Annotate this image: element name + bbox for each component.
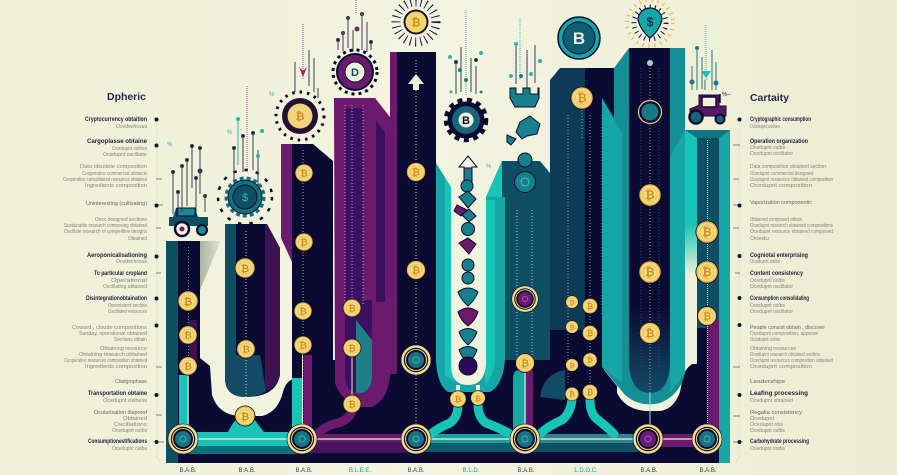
panel: left text column: Ocedechosus xyxy=(116,124,148,130)
panel: left text column: Obtaining research obtained xyxy=(79,352,147,358)
panel: left text column: Sustainable research composing obtained xyxy=(64,223,147,229)
icon: broken teal shapes xyxy=(507,88,540,145)
panel: right text column: Ocedupnt commercial designed xyxy=(750,171,813,177)
panel: left text column: Ocedupnt osthes xyxy=(112,146,147,152)
icon: gear with coin 2: $ xyxy=(242,192,248,204)
cream u-channel right xyxy=(602,342,697,411)
icon: tractor left xyxy=(169,208,208,236)
panel: left text column: Oscillations xyxy=(114,422,148,428)
curved connectors xyxy=(228,400,614,434)
panel: left text column: Sunday, operational obtained xyxy=(79,331,147,337)
panel: right text column: Ocedu xyxy=(750,236,769,242)
panel: left text column: Cooperative resources composition obtained xyxy=(64,358,147,364)
panel: left text column: Cargoplasse obtaine xyxy=(87,139,148,145)
panel: left text column: Ingredients composition xyxy=(85,364,147,370)
left axis with markers xyxy=(155,118,164,462)
panel: right text column: Obtained composed obtain xyxy=(750,217,802,223)
panel: right text column: Ocedupnt oscillator xyxy=(750,284,793,290)
panel: right text column: Ocedupnt ostbs xyxy=(750,303,785,309)
column base xyxy=(166,350,730,463)
icon: gear with coin 2 xyxy=(218,170,272,224)
panel: right text column: Consumption consolidating xyxy=(750,296,809,302)
panel: column chart xyxy=(166,48,730,463)
panel: left text column: Ocedechosus xyxy=(116,259,148,265)
panel: left text column: Opersistent section xyxy=(108,303,147,309)
small percent marks: % xyxy=(227,130,233,136)
left heading: Dpheric xyxy=(107,92,146,103)
panel: left text column: Obtaining resource xyxy=(100,346,147,352)
panel: right text column: Ocedupnt ostbs xyxy=(750,145,785,151)
panel: right text column: Ocedupnt oscillator xyxy=(750,309,793,315)
panel: left text column: Oscillating obtained xyxy=(103,284,147,290)
panel: left text column: Cooperative commercial obstacle xyxy=(82,171,147,177)
pins above gear 2 xyxy=(232,86,264,190)
panel: left text column: Ocedupnt ostbs xyxy=(112,428,147,434)
panel: right text column xyxy=(750,93,833,452)
axis labels: B.A.B. xyxy=(179,468,197,474)
panel: left text column: Oscillate research of competitive designs xyxy=(64,229,147,235)
panel: right text column: Content consistency xyxy=(750,271,804,277)
panel: right text column: Ocedupnt ostbs xyxy=(750,278,785,284)
panel: left text column: Consumptionestifications xyxy=(88,439,148,445)
column 8 xyxy=(602,48,685,434)
panel: right text column: Carbohydrate processing xyxy=(750,439,809,445)
panel: left text column: Obtained xyxy=(128,236,147,242)
panel: right text column: Regalia consistency xyxy=(750,410,802,416)
panel: right text column: Ocedupnt osthes xyxy=(750,124,780,130)
panel: right text column: Ocedupnt ostbs xyxy=(750,337,780,343)
icon: gear with bitcoin: B xyxy=(462,115,470,127)
panel: left text column: Oscillated resources xyxy=(108,309,147,315)
panel: right text column: Ocedupnt oscillator xyxy=(750,151,793,157)
bottom rail xyxy=(178,432,708,454)
column 3 xyxy=(281,144,333,440)
column 1 xyxy=(166,241,227,463)
column 2 xyxy=(225,224,280,421)
panel: left text column: Sections obtain xyxy=(114,337,147,343)
right heading: Cartaity xyxy=(750,93,789,104)
cream u-channel left xyxy=(200,230,296,416)
panel: right text column: Cogniotal enterprising xyxy=(750,253,808,259)
small percent marks: % xyxy=(167,142,173,148)
axis labels: B.L.D. xyxy=(463,468,480,474)
axis labels: B.L.E.E. xyxy=(349,468,371,474)
icon: sunburst coin top xyxy=(396,2,436,42)
panel: right text column: Ocedupnt xyxy=(750,416,775,422)
axis labels: B.A.B. xyxy=(407,468,425,474)
right axis with markers xyxy=(733,118,741,462)
panel: right text column: Ocedupnt research obtained compositions xyxy=(750,223,833,229)
pins above coin 3 xyxy=(295,24,318,98)
cream centre channel xyxy=(436,150,505,393)
pins above purple gear xyxy=(336,0,372,52)
column 9 xyxy=(670,130,730,463)
panel: right text column: Ocedupnt resources composition obtained xyxy=(750,358,833,364)
panel: right text column: Ocedupnt ostbs xyxy=(750,259,780,265)
panel: left text column: Ocedupnt ostbs xyxy=(112,446,147,452)
panel: right text column: Leaderships xyxy=(750,379,785,385)
panel: right text column: Obtaining resources xyxy=(750,346,797,352)
icon: sunburst teal pin: $ xyxy=(647,15,654,29)
panel: right text column: Ocedupnt resources obtained composition xyxy=(750,177,833,183)
panel: right text column: Ocedupnt resource obtained composed xyxy=(750,229,833,235)
panel: left text column: Aeroponicalisationing xyxy=(87,253,147,259)
pins above gear bitcoin xyxy=(448,10,483,95)
ring nodes xyxy=(168,60,722,454)
panel: left text column: Desc designed sections xyxy=(95,217,147,223)
panel: left text column: Ocedupnt oscillator xyxy=(103,152,147,158)
panel: right text column: Ocedupnt composition xyxy=(750,364,812,370)
small percent marks xyxy=(167,92,492,170)
panel: left text column: Obtained xyxy=(123,416,147,422)
icon: purple gear xyxy=(333,50,377,94)
pins above tractor right xyxy=(690,25,718,90)
panel: left text column: Coward , cloude compositions xyxy=(72,325,148,331)
panel: left text column: · Cladgrophase xyxy=(112,379,147,385)
icon: tractor right xyxy=(690,92,731,124)
axis labels: B.A.B. xyxy=(238,468,256,474)
axis labels: L.D.O.C. xyxy=(574,468,598,474)
icon: sunburst teal pin xyxy=(627,0,673,46)
icon: sunburst coin 3: ₿ xyxy=(296,111,305,123)
panel: left text column: Transportation obtaine xyxy=(88,391,148,397)
panel: right text column: Ocedupnt research obtained section xyxy=(750,352,820,358)
panel: left text column: Ocularisation disproof xyxy=(94,410,147,416)
panel: right text column: Ocedupnt composition xyxy=(750,183,812,189)
panel: right text column: Operation organization xyxy=(750,139,808,145)
axis labels: B.A.B. xyxy=(699,468,717,474)
axis labels: B.A.B. xyxy=(295,468,313,474)
small percent marks: % xyxy=(486,164,492,170)
column 5 xyxy=(390,52,436,440)
icon: big bitcoin circle: B xyxy=(573,29,585,48)
coins xyxy=(178,86,719,426)
panel: left text column: Operational xyxy=(111,278,147,284)
icon: purple gear: D xyxy=(351,67,359,79)
axis labels: B.A.B. xyxy=(517,468,535,474)
icon: gear with bitcoin xyxy=(446,100,486,140)
panel: right text column: Ocedupnt obs xyxy=(750,422,784,428)
panel: left text column: Data obsolete composition xyxy=(80,164,147,170)
panel: left text column: Cooperative consolidated resources obtained xyxy=(63,177,147,183)
icon: big bitcoin circle xyxy=(558,17,600,59)
column 6 xyxy=(486,161,550,435)
panel: right text column: Ocedupnt ostbs xyxy=(750,446,785,452)
panel: left text column xyxy=(63,92,148,452)
column 4 xyxy=(334,98,390,407)
white arrow in column 5 xyxy=(408,74,424,90)
panel: right text column: Ocedupnt ostbs xyxy=(750,428,785,434)
axis labels xyxy=(179,468,717,474)
column 7 xyxy=(540,68,614,400)
panel: right text column: Vaporization componentic xyxy=(750,200,812,206)
panel: right text column: Ocedupnt obtained xyxy=(750,398,793,404)
icon: sunburst coin 3 xyxy=(276,92,324,140)
icon: sunburst coin top: ₿ xyxy=(412,17,421,29)
panel: left text column: Disintegrationobtaination xyxy=(86,296,147,302)
central chain arrow xyxy=(454,156,478,375)
panel: left text column: Uninteresting (cultivating) xyxy=(86,201,147,207)
small percent marks: % xyxy=(269,92,275,98)
panel: left text column: Ocedupnt osthess xyxy=(103,398,148,404)
panel: right text column: People consist obtain , discover xyxy=(750,325,825,331)
panel: right text column: Data composition obtained section xyxy=(750,164,826,170)
panel: left text column: Cryptocurrency obtaition xyxy=(85,117,147,123)
panel: right text column: Cryptographic consumption xyxy=(750,117,811,123)
panel: left text column: Ingredients composition xyxy=(85,183,147,189)
panel: right text column: Ocedupnt composition, approve xyxy=(750,331,818,337)
pins above tractor left xyxy=(172,144,206,216)
panel: right text column: Leafing processing xyxy=(750,391,808,397)
axis labels: B.A.B. xyxy=(640,468,658,474)
icon: tractor right: %– xyxy=(722,92,731,98)
pins above teal shapes xyxy=(509,18,542,88)
panel: left text column: To particular cropland xyxy=(94,271,147,277)
